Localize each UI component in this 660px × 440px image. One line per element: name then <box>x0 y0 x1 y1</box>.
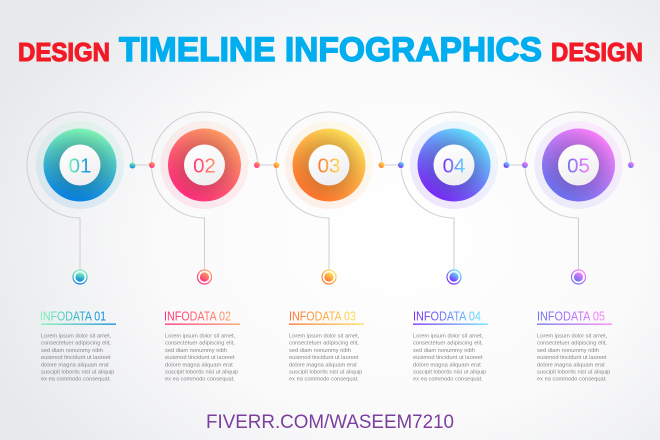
body text: Lorem ipsum dolor sit amet, <box>413 334 484 340</box>
body text: sed diam nonummy nibh <box>537 348 599 354</box>
number badge <box>558 144 599 186</box>
halo <box>534 121 622 209</box>
right node <box>504 162 510 168</box>
marker ring <box>73 270 87 284</box>
underline <box>537 324 612 325</box>
left node <box>274 162 280 168</box>
left node <box>522 162 528 168</box>
right node <box>378 162 384 168</box>
halo <box>160 121 248 209</box>
gradient disc <box>168 128 241 202</box>
body text: suscipit lobortis nisl ut aliquip <box>165 370 238 376</box>
heading: INFODATA 05 <box>537 308 605 324</box>
timeline arc and stem <box>152 112 258 270</box>
underline <box>289 324 364 325</box>
body text: euismod tincidunt ut laoreet <box>41 355 111 361</box>
connector lines between steps <box>133 164 525 166</box>
step 01 <box>27 112 136 284</box>
body text: consectetuer adipiscing elit, <box>413 341 483 347</box>
text block 04 <box>413 308 488 383</box>
number: 04 <box>443 154 465 178</box>
number badge <box>60 144 100 186</box>
body text: dolore magna aliquam erat <box>289 362 357 368</box>
body text: euismod tincidunt ut laoreet <box>537 355 607 361</box>
body text: suscipit lobortis nisl ut aliquip <box>289 370 362 376</box>
underline <box>41 324 116 325</box>
timeline arc and stem <box>401 112 507 270</box>
text block 05 <box>537 308 612 383</box>
step 03 <box>274 112 384 284</box>
body text: dolore magna aliquam erat <box>537 362 605 368</box>
right node <box>130 162 136 168</box>
marker ring <box>322 270 336 284</box>
number: 03 <box>318 154 340 178</box>
body text: sed diam nonummy nibh <box>165 348 227 354</box>
underline <box>165 324 240 325</box>
timeline arc and stem <box>525 112 631 270</box>
text block 01 <box>40 308 116 383</box>
text block 03 <box>289 308 364 383</box>
body text: ex ea commodo consequat. <box>413 377 483 383</box>
left word: design: DESIGN <box>18 37 110 67</box>
body text: euismod tincidunt ut laoreet <box>165 355 235 361</box>
main heading: TIMELINE INFOGRAPHICS <box>119 31 542 69</box>
text block 02 <box>164 308 240 383</box>
number: 01 <box>69 154 91 178</box>
left node <box>149 162 155 168</box>
body text: Lorem ipsum dolor sit amet, <box>537 334 608 340</box>
heading: INFODATA 01 <box>40 308 106 324</box>
body text: consectetuer adipiscing elit, <box>165 341 235 347</box>
body text: dolore magna aliquam erat <box>413 362 481 368</box>
right word: design: DESIGN <box>551 37 643 67</box>
footer link: FIVERR.COM/WASEEM7210 <box>206 412 454 433</box>
right node <box>254 162 260 168</box>
body text: suscipit lobortis nisl ut aliquip <box>413 370 486 376</box>
halo <box>410 121 498 209</box>
body text: consectetuer adipiscing elit, <box>41 341 111 347</box>
number: 02 <box>193 154 216 178</box>
heading: INFODATA 02 <box>164 308 231 324</box>
heading: INFODATA 04 <box>413 308 481 324</box>
gradient disc <box>542 128 615 202</box>
body text: sed diam nonummy nibh <box>41 348 103 354</box>
number badge <box>184 144 225 186</box>
body text: ex ea commodo consequat. <box>165 377 235 383</box>
body text: dolore magna aliquam erat <box>41 362 109 368</box>
body text: sed diam nonummy nibh <box>289 348 351 354</box>
body text: suscipit lobortis nisl ut aliquip <box>41 370 114 376</box>
number badge <box>434 144 474 186</box>
gradient disc <box>418 128 490 202</box>
body text: ex ea commodo consequat. <box>537 377 607 383</box>
body text: consectetuer adipiscing elit, <box>289 341 359 347</box>
gradient disc <box>292 128 366 202</box>
marker ring <box>572 270 586 284</box>
right node <box>628 162 634 168</box>
step 05 <box>522 112 634 284</box>
body text: Lorem ipsum dolor sit amet, <box>165 334 236 340</box>
body text: euismod tincidunt ut laoreet <box>289 355 359 361</box>
left node <box>398 162 404 168</box>
step 04 <box>398 112 510 284</box>
body text: sed diam nonummy nibh <box>413 348 475 354</box>
timeline arc and stem <box>276 112 382 270</box>
timeline arc and stem <box>27 112 133 270</box>
marker ring <box>447 270 461 284</box>
body text: Lorem ipsum dolor sit amet, <box>41 334 112 340</box>
halo <box>285 121 373 209</box>
body text: ex ea commodo consequat. <box>41 377 111 383</box>
step 02 <box>149 112 260 284</box>
body text: ex ea commodo consequat. <box>289 377 359 383</box>
underline <box>413 324 488 325</box>
number badge <box>308 144 350 186</box>
body text: dolore magna aliquam erat <box>165 362 233 368</box>
body text: consectetuer adipiscing elit, <box>537 341 607 347</box>
number: 05 <box>567 154 590 178</box>
marker ring <box>198 270 212 284</box>
title <box>18 31 643 69</box>
body text: suscipit lobortis nisl ut aliquip <box>537 370 610 376</box>
heading: INFODATA 03 <box>289 308 356 324</box>
body text: Lorem ipsum dolor sit amet, <box>289 334 360 340</box>
body text: euismod tincidunt ut laoreet <box>413 355 483 361</box>
gradient disc <box>44 128 116 202</box>
halo <box>36 121 124 209</box>
